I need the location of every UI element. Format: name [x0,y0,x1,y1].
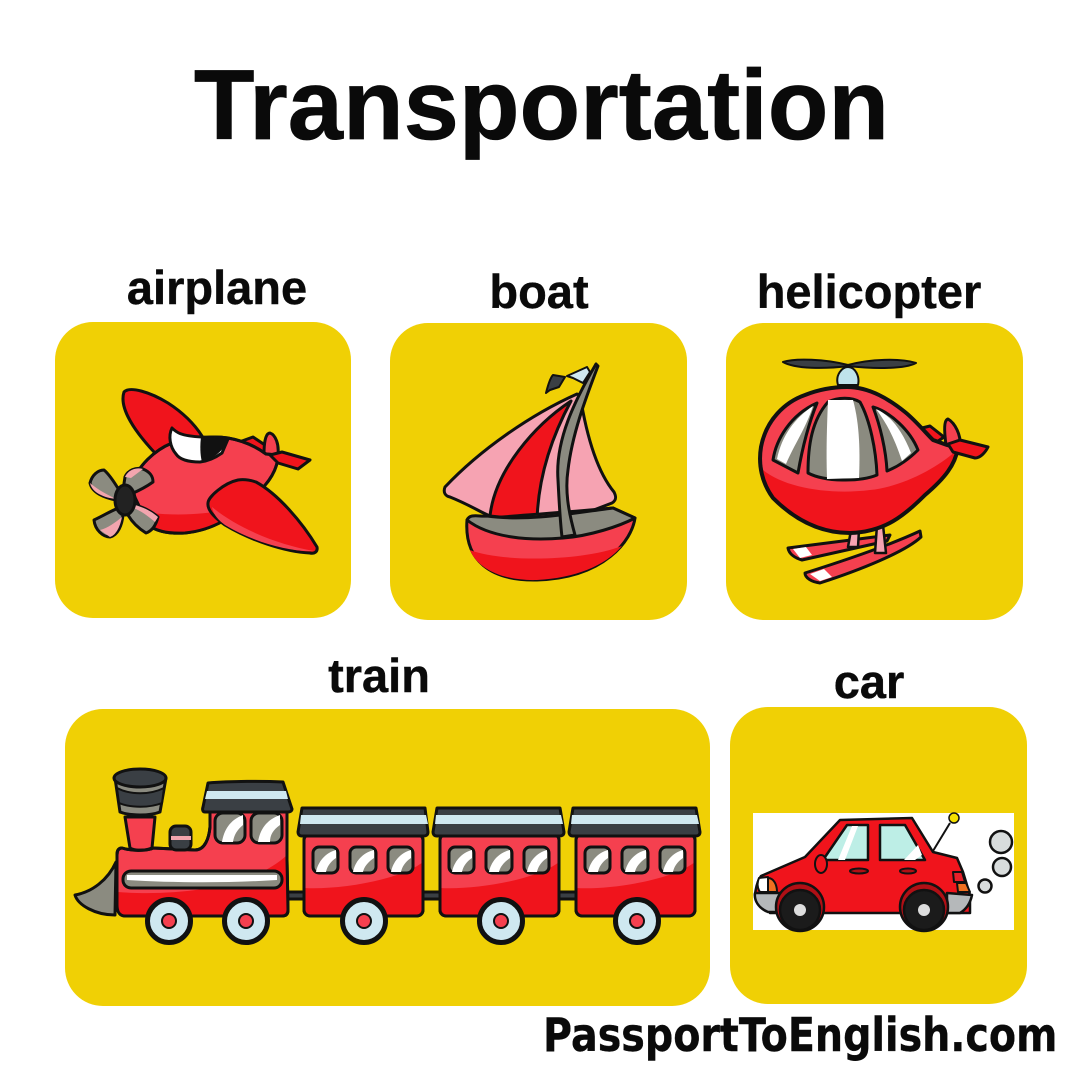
panel: train [65,709,710,1006]
icon: airplane [90,390,317,553]
panel: car [730,707,1027,1004]
icon: car [755,813,1012,931]
carriage 3 [569,808,700,916]
carriage 2 [433,808,564,916]
panel: helicopter [726,323,1023,620]
carriage 1 [298,808,428,916]
label: train: train [328,649,430,702]
label: airplane: airplane [127,261,307,314]
label: car: car [834,655,904,708]
panel: airplane [55,322,351,618]
icon: helicopter [760,360,988,583]
icon: boat [444,364,635,580]
website credit: PassportToEnglish.com [543,1008,1057,1062]
wheels [148,900,658,942]
icon: train [75,769,700,942]
title: Transportation [194,50,889,161]
label: helicopter: helicopter [757,265,981,318]
panel: boat [390,323,687,620]
label: boat: boat [489,265,589,318]
